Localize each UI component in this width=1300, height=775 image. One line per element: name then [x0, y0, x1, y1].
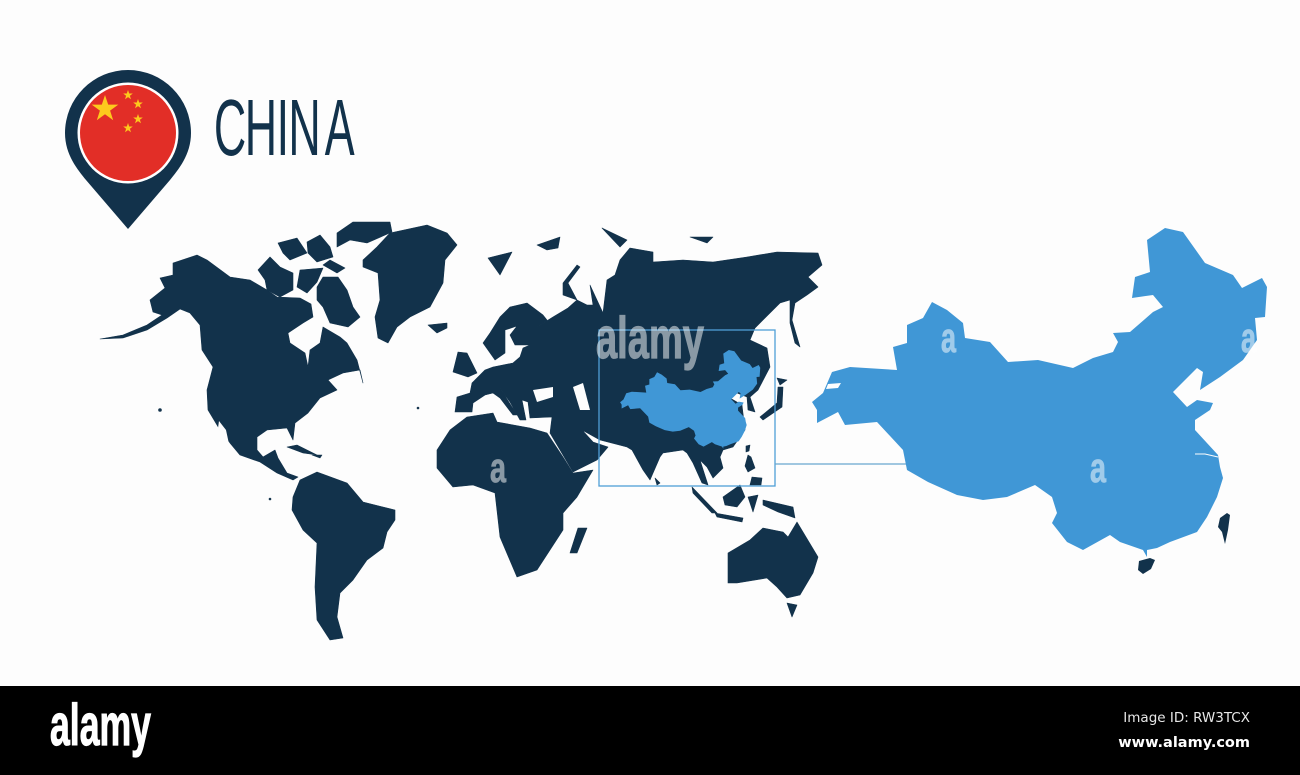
Sri Lanka: [655, 478, 660, 485]
Taiwan enlarged: [1218, 513, 1230, 544]
title: CHINA: [214, 82, 355, 172]
watermark letters: a: [941, 314, 956, 361]
website: www.alamy.com: [1118, 735, 1250, 751]
Iceland: [428, 323, 447, 333]
icon: small flag stars: [123, 90, 143, 132]
footer logo: alamy: [50, 693, 151, 758]
Great Britain and Ireland: [453, 352, 477, 377]
map marker pin with China flag: [65, 70, 191, 229]
Hainan enlarged: [1138, 558, 1155, 574]
Japan: [760, 378, 787, 420]
icon: large flag star: [92, 95, 118, 120]
Caribbean and Pacific islands: [158, 407, 419, 500]
Caspian Sea: [573, 383, 590, 410]
Greenland: [363, 225, 457, 343]
image id: Image ID: RW3TCX: [1123, 710, 1250, 726]
China highlighted on world map: [620, 350, 760, 449]
inland lake notch: [826, 383, 841, 389]
Indonesia and New Guinea: [692, 485, 795, 522]
watermark letters: a: [1241, 314, 1256, 361]
Africa: [437, 413, 593, 577]
footer bar: [0, 686, 1300, 775]
China enlarged map: [812, 228, 1267, 557]
Madagascar: [570, 528, 587, 553]
watermark letters: a: [490, 444, 506, 491]
Gulf of California: [218, 421, 229, 444]
Canadian Arctic islands: [258, 222, 392, 327]
Taiwan: [746, 445, 750, 452]
North America: [100, 255, 363, 480]
South America: [292, 472, 395, 640]
locator rectangle: [599, 330, 775, 486]
Arctic Eurasian islands: [488, 228, 713, 300]
Yangtze sliver: [1195, 454, 1218, 457]
Eurasia: [455, 248, 822, 485]
Black Sea: [533, 387, 553, 402]
watermark letters: [490, 314, 1256, 491]
Tasmania: [787, 603, 797, 617]
watermark: alamy centre: alamy: [596, 306, 704, 371]
Philippines: [745, 455, 762, 485]
world map: [100, 222, 822, 640]
connector line: [775, 463, 906, 465]
watermark letters: a: [1090, 444, 1106, 491]
Australia: [728, 522, 818, 598]
